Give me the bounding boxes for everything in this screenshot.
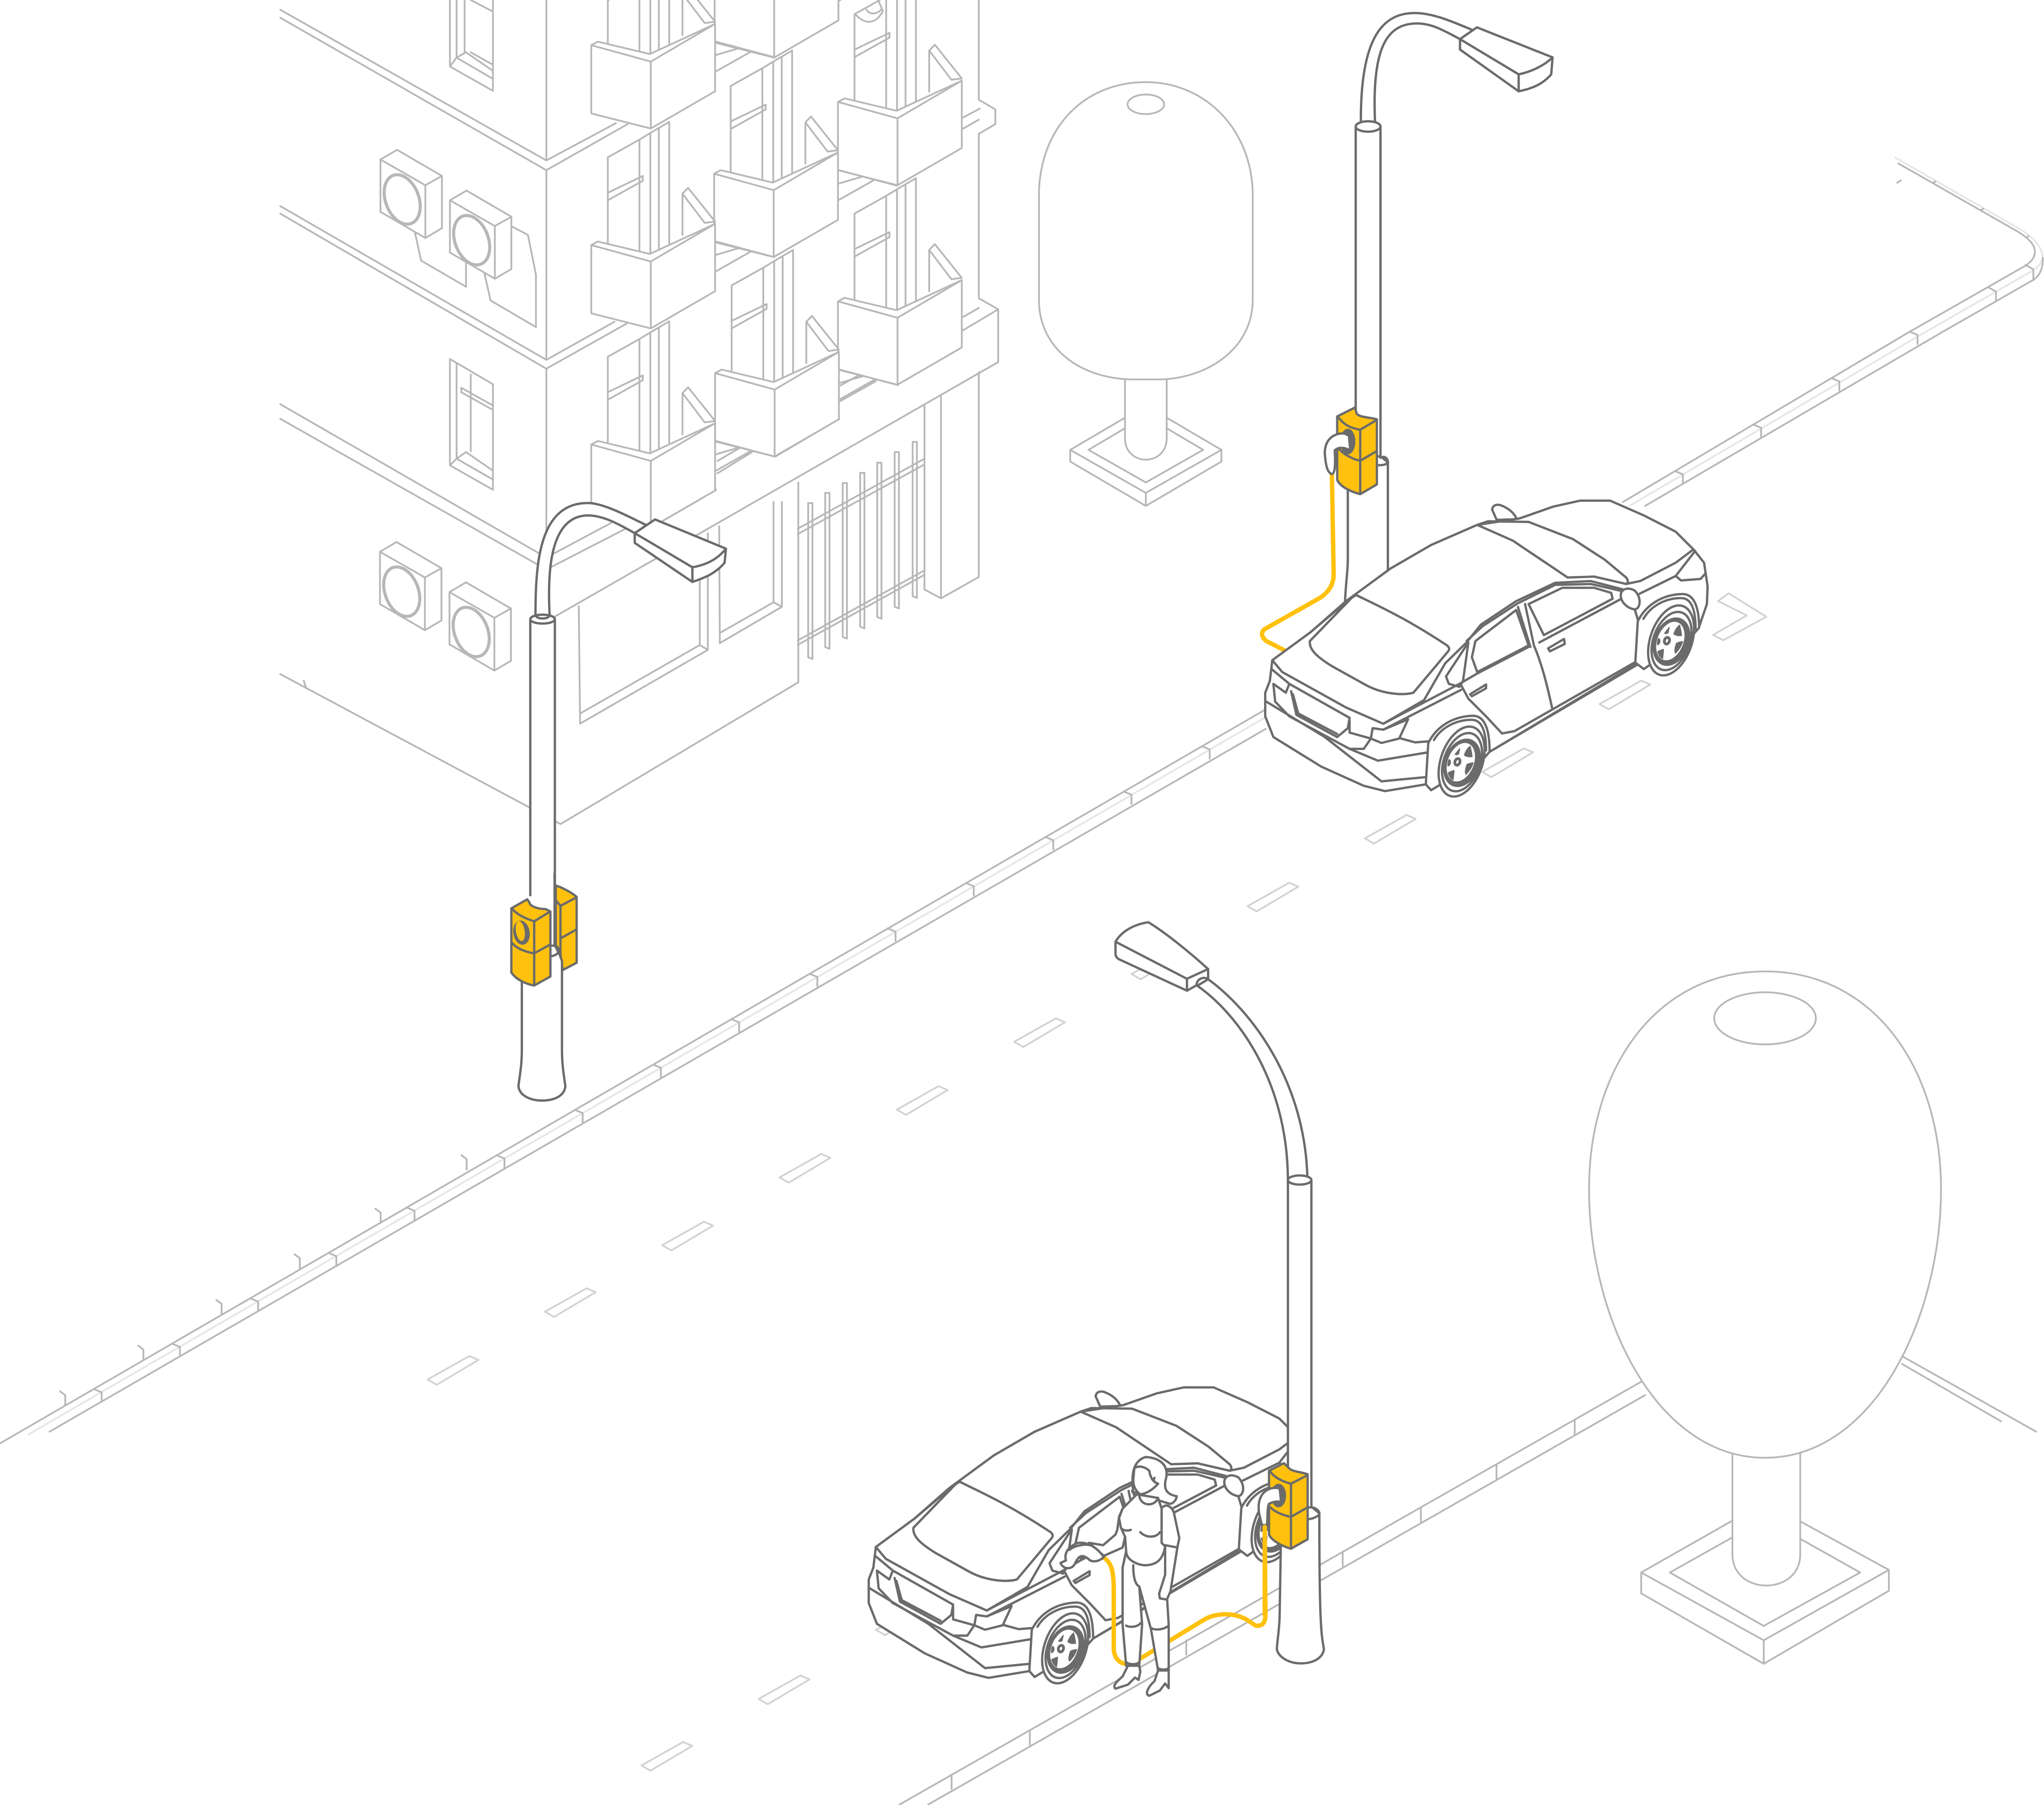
- plug: [1258, 1488, 1281, 1525]
- charging cable top: [1262, 471, 1333, 653]
- hair: [1132, 1457, 1177, 1504]
- plug in hand: [1061, 1543, 1104, 1568]
- street lamp bottom: [1115, 922, 1324, 1663]
- right wall and base: [550, 0, 998, 619]
- plug: [1325, 434, 1350, 474]
- shoes: [1114, 1666, 1140, 1689]
- street lamp top right: [1345, 13, 1553, 604]
- lane dashes: [428, 593, 1767, 1771]
- lower curb: [899, 1356, 2036, 1805]
- pillar: [925, 372, 979, 598]
- lamp head: [1115, 922, 1208, 991]
- upper curb: [0, 330, 1945, 1444]
- charger box bottom: [1258, 1463, 1308, 1615]
- facade bands: [280, 0, 658, 569]
- torso and arm: [1089, 1495, 1165, 1565]
- left windows: [450, 0, 493, 490]
- tree: back: [1039, 82, 1253, 506]
- pole base: [1345, 456, 1388, 604]
- road corner top right: [1895, 158, 2043, 330]
- legs: [1123, 1546, 1170, 1671]
- lamp arm and pole: [1197, 979, 1311, 1513]
- lamp pole base and charger: [511, 873, 577, 1100]
- balconies: [591, 0, 962, 528]
- pole base: [1277, 1508, 1324, 1663]
- air conditioner units: [377, 150, 536, 670]
- car bottom: [869, 1388, 1311, 1690]
- parking corner mark: [1713, 593, 1767, 640]
- car top right: [1265, 501, 1708, 803]
- street lamp left: [511, 503, 726, 1100]
- lamp head and pole: [530, 503, 726, 904]
- other arm: [1159, 1506, 1179, 1600]
- gate: [798, 442, 925, 659]
- lamp head and arm: [1356, 13, 1553, 456]
- charger box top right: [1325, 408, 1377, 494]
- face: [1133, 1467, 1158, 1495]
- woman with charging plug: [1061, 1457, 1179, 1696]
- charging cable bottom: [1104, 1527, 1265, 1664]
- building lower outline and shop windows: [280, 482, 799, 824]
- tree: front: [1589, 972, 1941, 1664]
- building: [280, 0, 998, 670]
